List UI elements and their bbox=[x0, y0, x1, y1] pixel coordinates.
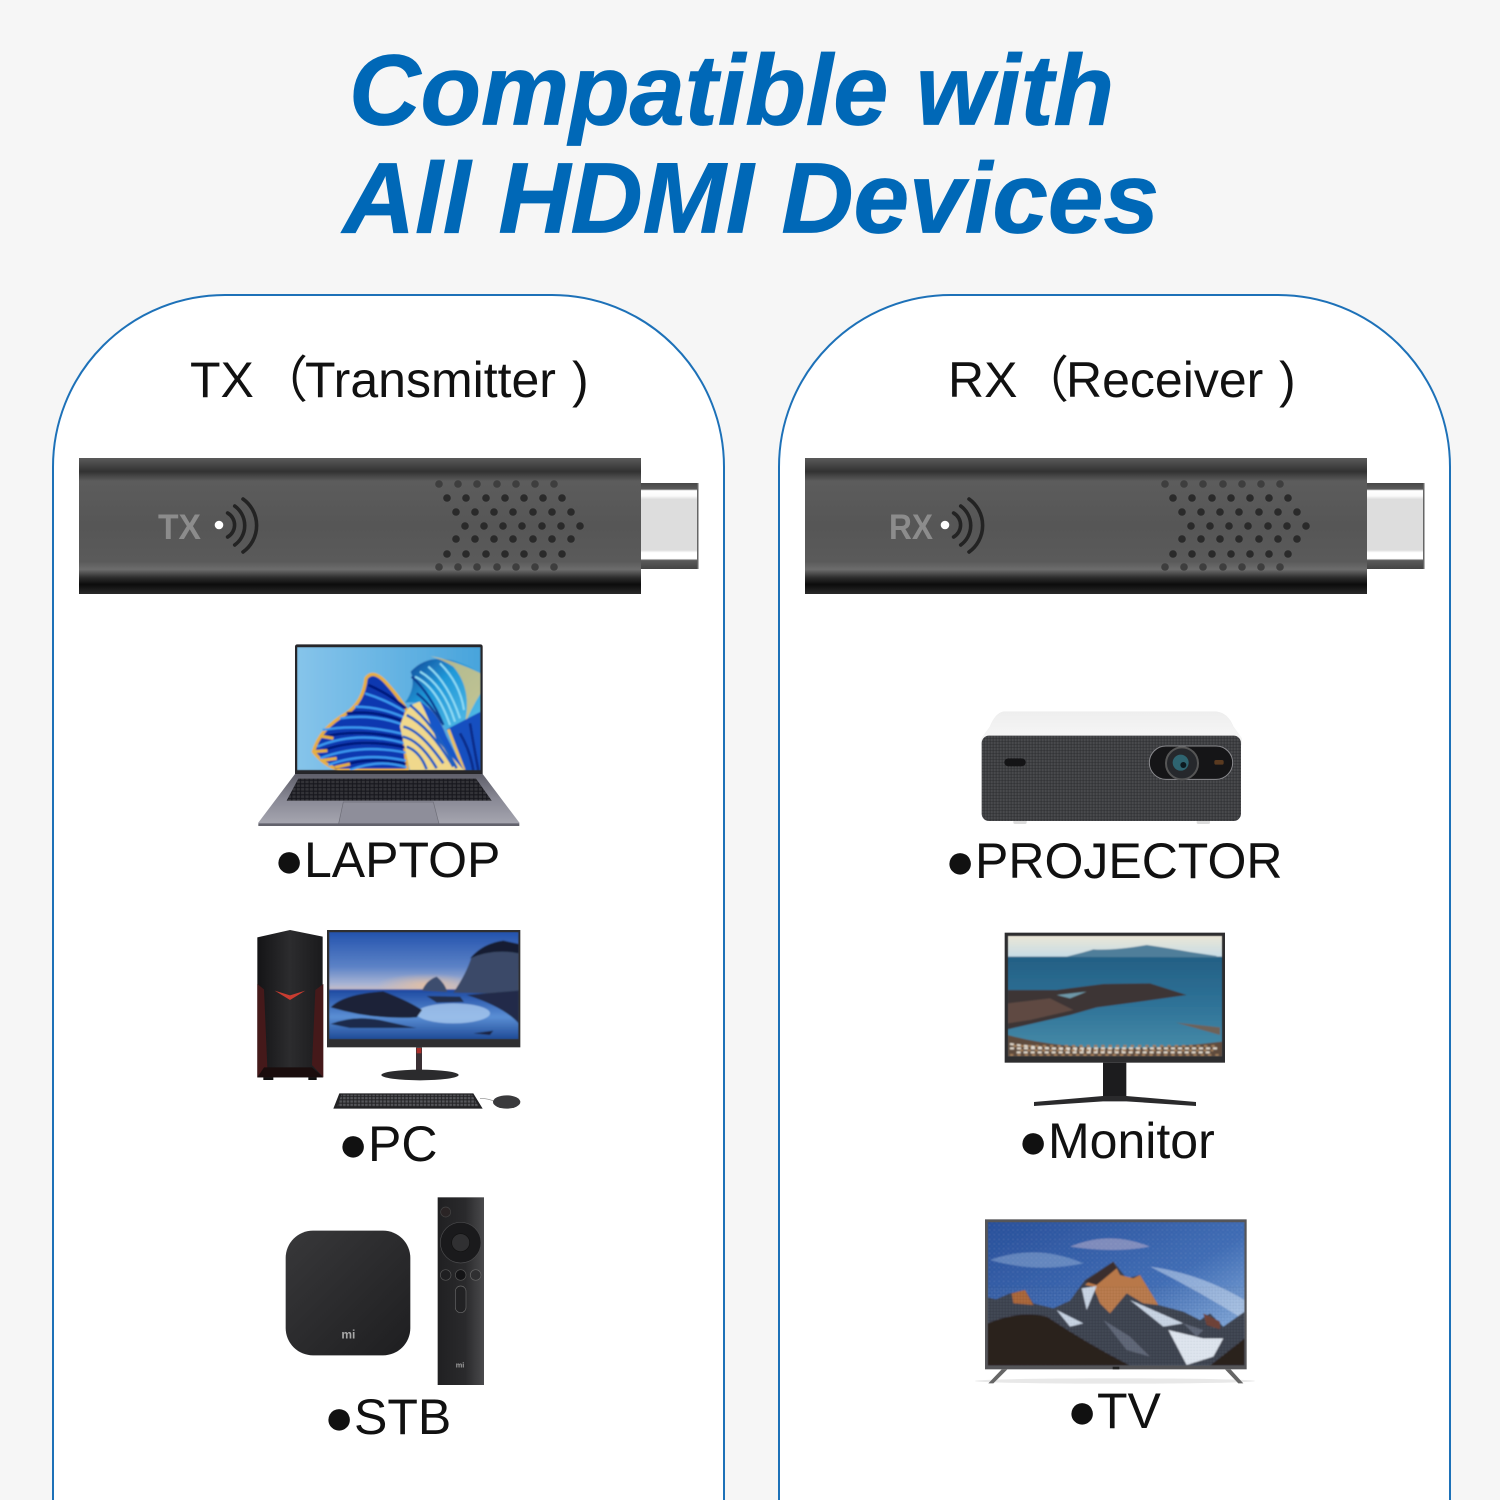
heading: RX: ) bbox=[1279, 352, 1296, 408]
panel: TX transmitter bbox=[53, 295, 724, 1500]
desktop monitor bbox=[327, 930, 520, 1080]
label: LAPTOP: ● bbox=[274, 832, 304, 888]
label: Monitor: Monitor bbox=[1048, 1113, 1215, 1169]
label: STB: STB bbox=[354, 1389, 451, 1445]
device: set-top box and remote bbox=[286, 1197, 484, 1385]
device: monitor bbox=[1005, 933, 1225, 1106]
title bbox=[340, 34, 1159, 254]
label: TV: TV bbox=[1097, 1383, 1162, 1439]
heading: TX: TX bbox=[190, 352, 254, 408]
title: All HDMI Devices bbox=[340, 142, 1159, 254]
heading: RX: Receiver bbox=[1066, 352, 1263, 408]
dongle: RX: RX bbox=[889, 508, 934, 547]
label: LAPTOP: LAPTOP bbox=[304, 832, 500, 888]
label: STB: ● bbox=[324, 1389, 354, 1445]
device: laptop bbox=[258, 644, 519, 826]
device: TV bbox=[975, 1219, 1255, 1384]
heading: RX: RX bbox=[948, 352, 1017, 408]
title: Compatible with bbox=[349, 34, 1114, 146]
label: PC: ● bbox=[338, 1116, 368, 1172]
set-top box: mi bbox=[341, 1328, 355, 1342]
heading: RX: （ bbox=[1019, 352, 1069, 408]
label: PROJECTOR: PROJECTOR bbox=[975, 833, 1282, 889]
remote control: mi bbox=[456, 1360, 464, 1369]
heading: TX: ) bbox=[572, 352, 589, 408]
set-top box bbox=[286, 1231, 410, 1355]
label: PROJECTOR: ● bbox=[945, 833, 975, 889]
label: Monitor: ● bbox=[1018, 1113, 1048, 1169]
heading: TX: （ bbox=[258, 352, 308, 408]
dongle: RX bbox=[805, 458, 1424, 594]
label: TV: ● bbox=[1067, 1383, 1097, 1439]
panel: RX receiver bbox=[779, 295, 1450, 1500]
panel outline bbox=[779, 295, 1450, 1500]
heading: TX: Transmitter bbox=[305, 352, 556, 408]
device: PC tower, monitor, keyboard and mouse bbox=[257, 930, 520, 1109]
remote control bbox=[438, 1197, 484, 1385]
keyboard bbox=[333, 1093, 483, 1109]
label: PC: PC bbox=[368, 1116, 437, 1172]
panel outline bbox=[53, 295, 724, 1500]
PC tower bbox=[257, 930, 323, 1080]
mouse bbox=[480, 1095, 520, 1109]
dongle: TX bbox=[79, 458, 698, 594]
dongle: TX: TX bbox=[158, 508, 202, 547]
device: projector bbox=[982, 712, 1242, 824]
